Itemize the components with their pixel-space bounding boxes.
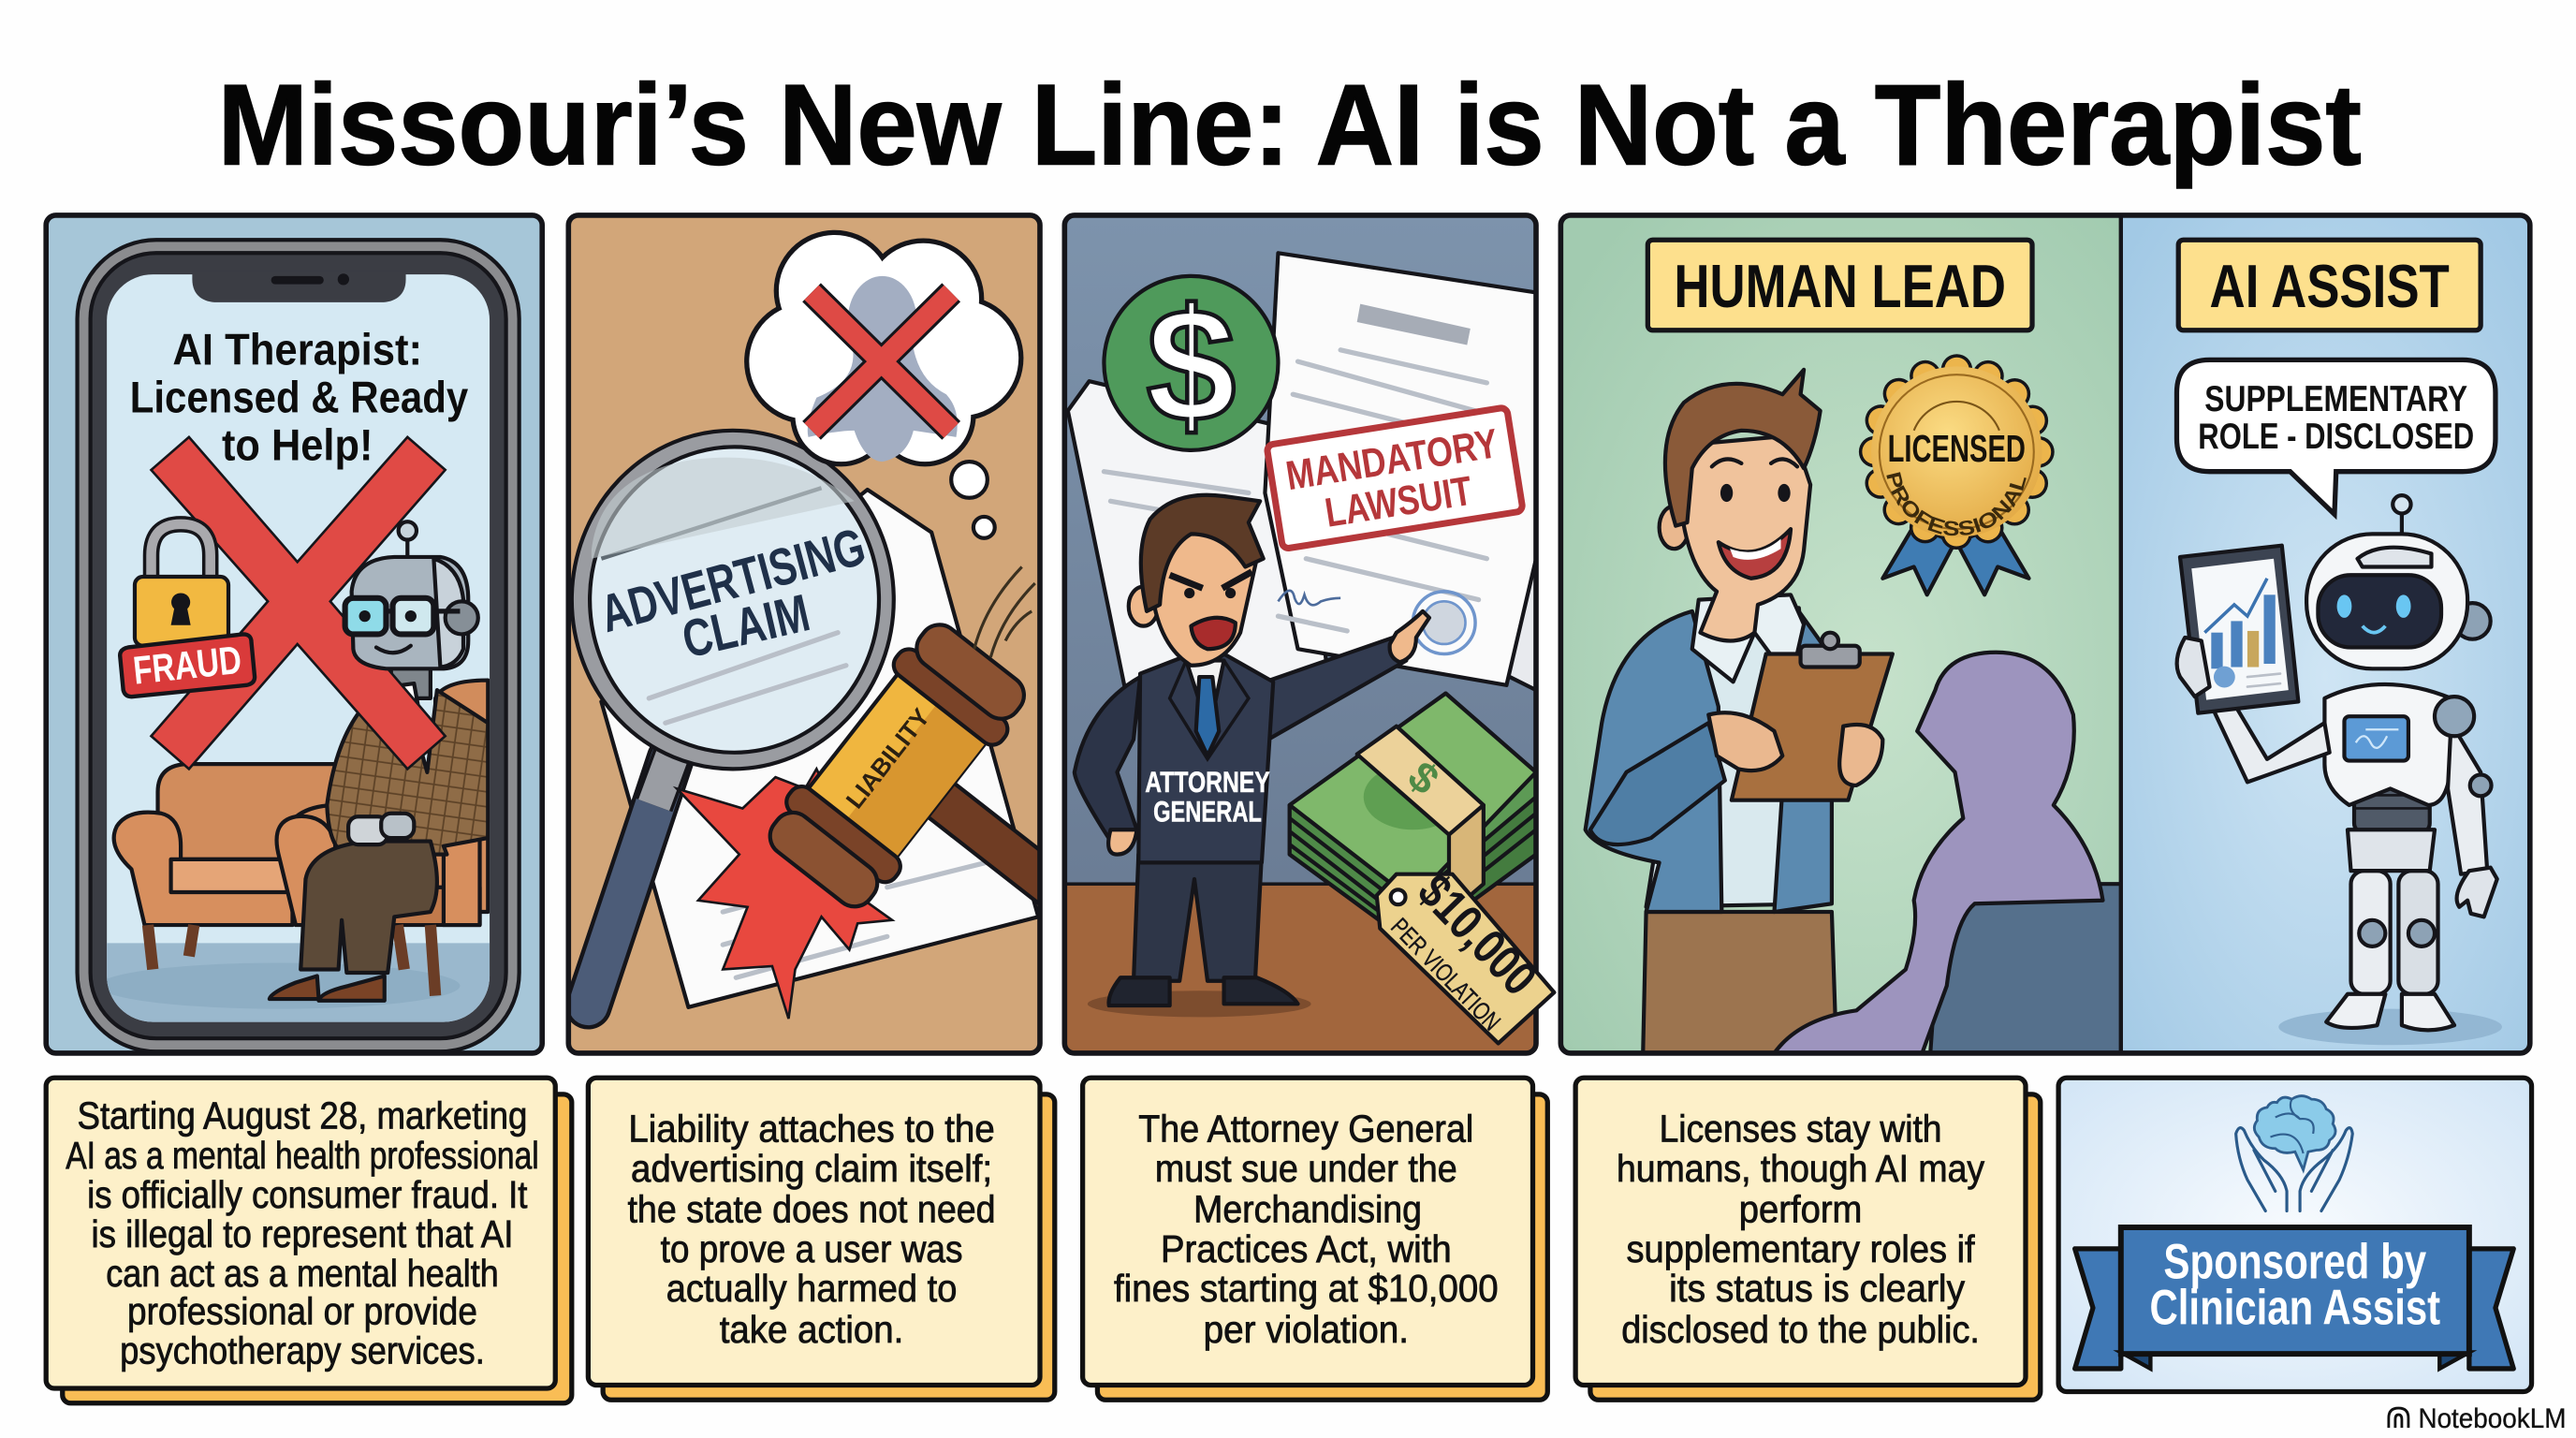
caption card 3: must sue under the [1155,1147,1457,1190]
money stack: $ [1399,752,1448,803]
icon: gavel: LIABILITY [841,703,935,814]
title: Missouri’s New Line: AI is Not a Therapist [218,62,2362,190]
magnifier label: ADVERTISING [594,516,871,643]
caption card 3: Practices Act, with [1161,1227,1452,1270]
caption card 2: advertising claim itself; [631,1147,992,1190]
floor [1064,884,1536,1053]
caption card 2: take action. [720,1308,903,1351]
magnifier label [607,530,865,655]
friendly robot with tablet [2177,495,2502,1045]
caption card 2: the state does not need [627,1188,996,1231]
caption card 4 [1575,1078,2041,1400]
robot head with glasses [345,521,478,668]
mandatory lawsuit stamp: LAWSUIT [1322,468,1475,536]
icon: brain in caring hands [2236,1096,2352,1211]
icon: licensed professional seal: PROFESSIONAL [1886,472,2027,536]
document under magnifier [601,490,1038,1007]
caption card 1: AI as a mental health professional [66,1134,539,1177]
NotebookLM credit: NotebookLM [2418,1403,2566,1434]
panel: AI assist [2121,215,2530,1053]
icon: phone frame [78,240,520,1051]
caption card 3: Merchandising [1193,1188,1422,1231]
caption card 3: fines starting at $10,000 [1114,1267,1499,1310]
caption card 2: Liability attaches to the [628,1108,995,1151]
professional figure with clipboard [1586,370,1893,1060]
caption card 2: actually harmed to [666,1267,957,1310]
caption card 1: professional or provide [127,1290,477,1333]
robot therapist body in plaid jacket [270,666,488,1001]
caption card 4: humans, though AI may [1617,1147,1985,1190]
caption card 3 [1083,1078,1547,1400]
human lead heading [1647,240,2032,330]
icon: impact burst [677,769,892,1019]
caption card 4: disclosed to the public. [1621,1308,1980,1351]
caption card 3: The Attorney General [1138,1108,1473,1151]
speech bubble: SUPPLEMENTARY [2204,379,2467,419]
icon: padlock with fraud tag: FRAUD [131,638,243,693]
sponsor ribbon banner [2075,1227,2513,1369]
armchairs [114,681,488,996]
phone headline [130,326,469,470]
caption card 1: psychotherapy services. [120,1329,485,1372]
AI assist heading: AI ASSIST [2210,252,2450,320]
icon: magnifying glass [572,431,894,1005]
icon: licensed professional seal [1859,354,2055,597]
mandatory lawsuit stamp [1266,407,1523,549]
room floor [107,943,490,1025]
suit label [1146,771,1270,822]
icon: red X [152,437,446,769]
panel: phone with fake AI therapist [46,215,542,1053]
price tag: $10,000 per violation: PER VIOLATION [1385,913,1506,1036]
phone headline: Licensed & Ready [130,374,469,423]
caption card 4: its status is clearly [1669,1267,1966,1310]
icon: gavel [768,623,1037,908]
caption card 4: perform [1739,1188,1862,1231]
caption card 1: can act as a mental health [106,1252,499,1295]
panel: advertising claim and liability [565,213,1043,1056]
caption card 1: is officially consumer fraud. It [87,1173,527,1216]
caption card 1: is illegal to represent that AI [91,1212,514,1255]
caption card 4: supplementary roles if [1627,1227,1975,1270]
attorney general figure [1075,495,1429,1017]
caption card 1 [46,1078,572,1403]
caption card 3: per violation. [1204,1308,1409,1351]
icon: padlock with fraud tag [120,524,255,697]
patient silhouette and chair [1774,653,2128,1060]
sponsor ribbon banner: Clinician Assist [2150,1281,2440,1336]
speech bubble [2176,360,2496,514]
caption card 2: to prove a user was [661,1227,963,1270]
magnifier label: CLAIM [677,582,815,669]
speech bubble: ROLE - DISCLOSED [2198,417,2474,457]
suit label: GENERAL [1153,795,1262,829]
suit label: ATTORNEY [1145,765,1270,799]
caption card 2 [588,1078,1055,1400]
panel: human lead [1563,217,2119,1050]
sponsor panel [2058,1078,2532,1392]
caption card 4: Licenses stay with [1660,1108,1942,1151]
AI assist heading [2178,240,2481,330]
money stack [1290,694,1536,945]
sponsor ribbon banner: Sponsored by [2163,1234,2426,1289]
caption card 1: Starting August 28, marketing [78,1094,527,1137]
icon: dollar coin [1104,275,1278,455]
icon: licensed professional seal: LICENSED [1888,427,2026,470]
mandatory lawsuit stamp: MANDATORY [1282,420,1500,499]
human lead heading: HUMAN LEAD [1674,252,2006,320]
motion lines [974,566,1035,657]
thought bubble with crossed-out therapist [744,230,1023,538]
icon: dollar coin: $ [1147,275,1236,455]
panel frame and divider [1560,215,2530,1053]
phone headline: AI Therapist: [172,326,422,375]
phone headline: to Help! [222,420,373,470]
legal documents [1068,253,1536,698]
panel: attorney general lawsuit [1064,215,1554,1053]
price tag: $10,000 per violation: $10,000 [1407,863,1547,1006]
